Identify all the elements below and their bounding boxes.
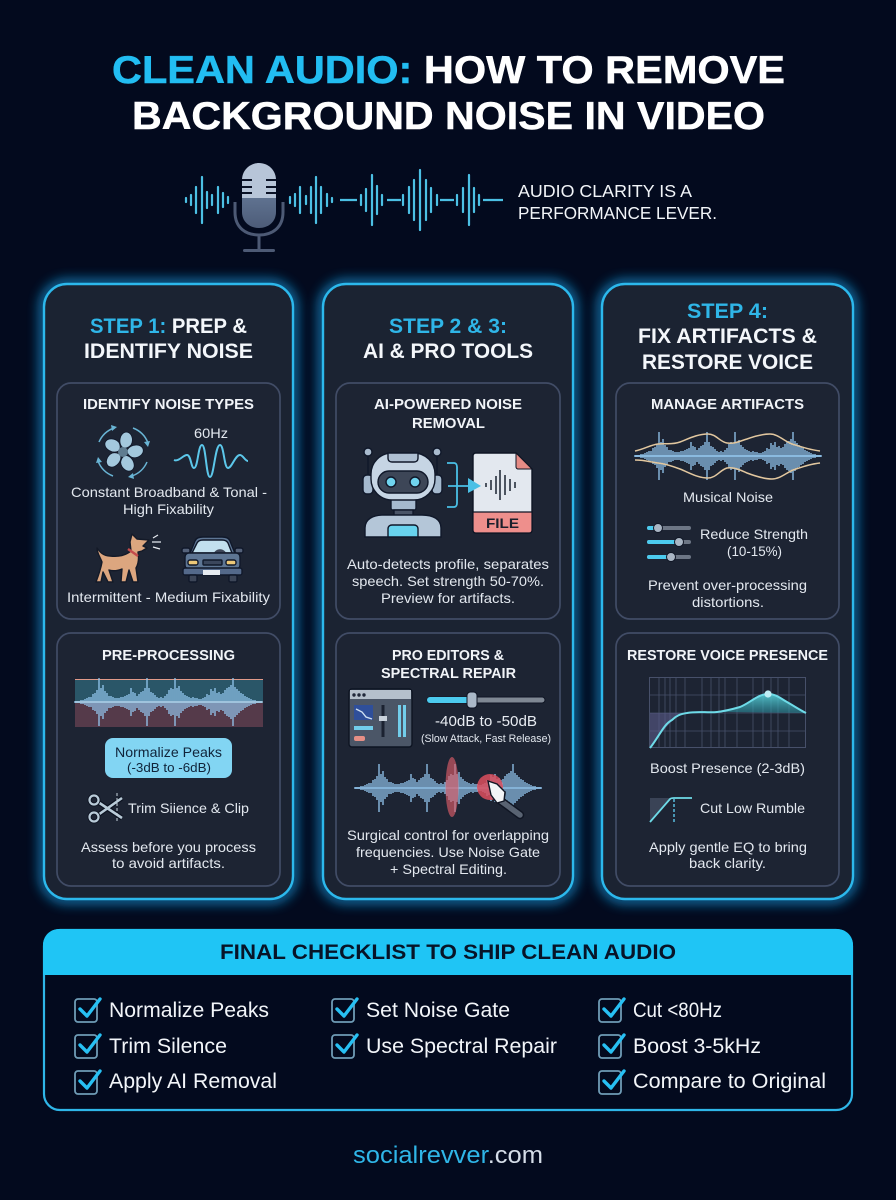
- card: ai-powered noise removal: speech. Set strength 50-70%.: [352, 573, 544, 589]
- card: pro editors and spectral repair: frequencies. Use Noise Gate: [356, 844, 540, 860]
- checklist column 2: Use Spectral Repair: [366, 1035, 557, 1058]
- card: ai-powered noise removal: Auto-detects profile, separates: [347, 556, 549, 572]
- card: pre-processing: [57, 633, 280, 886]
- card: pro editors and spectral repair: PRO EDITORS &: [392, 648, 505, 664]
- card: ai-powered noise removal: REMOVAL: [412, 416, 485, 432]
- card: pre-processing: PRE-PROCESSING: [102, 648, 235, 664]
- card: pre-processing: Assess before you process: [81, 839, 256, 855]
- panel: step 1: [44, 284, 293, 899]
- card: manage artifacts: [616, 383, 839, 619]
- card: identify noise types: 60Hz: [194, 425, 228, 441]
- button: normalize peaks: [105, 738, 232, 778]
- card: identify noise types: IDENTIFY NOISE TYPES: [83, 397, 254, 413]
- card: manage artifacts: Prevent over-processing: [648, 577, 807, 593]
- card: identify noise types: Intermittent - Medium Fixability: [67, 589, 270, 605]
- icon: microphone: [235, 163, 283, 252]
- icon: tonal sine wave: [174, 445, 248, 477]
- card: restore voice presence: [616, 633, 839, 886]
- checklist header: FINAL CHECKLIST TO SHIP CLEAN AUDIO: [220, 940, 676, 964]
- heading: step 2 and 3: STEP 2 & 3:: [389, 314, 507, 338]
- tagline: PERFORMANCE LEVER.: [518, 203, 717, 223]
- card: manage artifacts: (10-15%): [727, 543, 782, 559]
- icon: strength sliders: [647, 524, 691, 562]
- icon: mixer window: [349, 689, 412, 747]
- card: identify noise types: High Fixability: [123, 501, 214, 517]
- spectral waveform with repair brush: [355, 757, 541, 817]
- heading: step 4: [638, 299, 817, 374]
- card: restore voice presence: Cut Low Rumble: [700, 800, 805, 816]
- card: pro editors and spectral repair: SPECTRAL REPAIR: [381, 666, 517, 682]
- checklist column 1: Apply AI Removal: [109, 1070, 277, 1093]
- card: manage artifacts: MANAGE ARTIFACTS: [651, 397, 804, 413]
- card: manage artifacts: Musical Noise: [683, 489, 773, 505]
- card: pre-processing: to avoid artifacts.: [112, 855, 225, 871]
- heading: step 2 and 3: [363, 314, 533, 363]
- card: ai-powered noise removal: Preview for artifacts.: [381, 590, 515, 606]
- card: pro editors and spectral repair: -40dB to -50dB: [435, 713, 537, 730]
- button: normalize peaks: Normalize Peaks: [115, 744, 222, 760]
- heading: step 4: RESTORE VOICE: [642, 350, 813, 374]
- title: [112, 49, 785, 138]
- card: identify noise types: Constant Broadband & Tonal -: [71, 484, 267, 500]
- heading: step 4: STEP 4:: [687, 299, 768, 323]
- card: restore voice presence: RESTORE VOICE PRESENCE: [627, 648, 828, 664]
- checklist column 3: [599, 999, 826, 1094]
- waveform with musical noise: [635, 432, 821, 480]
- icon: car: [182, 537, 243, 582]
- title: CLEAN AUDIO: HOW TO REMOVE: [112, 49, 785, 92]
- icon: scissors: [90, 793, 122, 823]
- slider: [427, 692, 545, 708]
- heading: step 1: IDENTIFY NOISE: [84, 339, 253, 363]
- icon: audio file: FILE: [486, 515, 519, 531]
- checklist column 3: Cut <80Hz: [633, 999, 722, 1022]
- heading: step 1: [84, 314, 253, 363]
- icon: low cut filter: [650, 798, 692, 822]
- icon: audio file: [473, 453, 532, 533]
- heading: step 4: FIX ARTIFACTS &: [638, 324, 817, 348]
- card: pro editors and spectral repair: + Spectral Editing.: [390, 861, 507, 877]
- panel: step 2 and 3: [323, 284, 573, 899]
- checklist column 3: Boost 3-5kHz: [633, 1035, 761, 1058]
- checklist column 1: [75, 999, 277, 1094]
- checklist column 1: Trim Silence: [109, 1035, 227, 1058]
- card: ai-powered noise removal: AI-POWERED NOISE: [374, 397, 522, 413]
- card: pro editors and spectral repair: Surgical control for overlapping: [347, 827, 549, 843]
- footer: website: socialrevver .com: [353, 1142, 543, 1169]
- heading: step 1: STEP 1: PREP &: [90, 314, 247, 338]
- card: restore voice presence: Boost Presence (2-3dB): [650, 760, 805, 776]
- checklist header: [43, 929, 853, 975]
- card: manage artifacts: distortions.: [692, 594, 764, 610]
- card: identify noise types: [57, 383, 280, 619]
- heading: step 2 and 3: AI & PRO TOOLS: [363, 339, 533, 363]
- card: manage artifacts: Reduce Strength: [700, 526, 808, 542]
- checklist column 3: Compare to Original: [633, 1070, 826, 1093]
- card: restore voice presence: back clarity.: [689, 855, 766, 871]
- chart: eq curve: [649, 677, 806, 748]
- panel: final checklist: [43, 929, 853, 1110]
- card: restore voice presence: Apply gentle EQ to bring: [649, 839, 807, 855]
- icon: barking dog: [96, 534, 161, 582]
- button: normalize peaks: (-3dB to -6dB): [127, 760, 211, 775]
- card: ai-powered noise removal: [336, 383, 560, 619]
- tagline: AUDIO CLARITY IS A: [518, 181, 692, 201]
- checklist column 2: [332, 999, 557, 1058]
- checklist column 1: Normalize Peaks: [109, 999, 269, 1022]
- tagline: [518, 181, 717, 223]
- panel: step 4: [602, 284, 853, 899]
- icon: robot: [363, 448, 442, 537]
- icon: arrow with bracket: [447, 463, 481, 507]
- checklist column 2: Set Noise Gate: [366, 999, 510, 1022]
- icon: brush: [488, 781, 520, 815]
- card: pre-processing: Trim Siience & Clip: [128, 800, 249, 816]
- waveform with peak limits: [75, 678, 263, 727]
- card: pro editors and spectral repair: [336, 633, 560, 886]
- card: pro editors and spectral repair: (Slow Attack, Fast Release): [421, 733, 551, 745]
- title: BACKGROUND NOISE IN VIDEO: [132, 95, 765, 138]
- icon: fan: [96, 425, 150, 479]
- icon: waveform with microphone: [186, 163, 503, 252]
